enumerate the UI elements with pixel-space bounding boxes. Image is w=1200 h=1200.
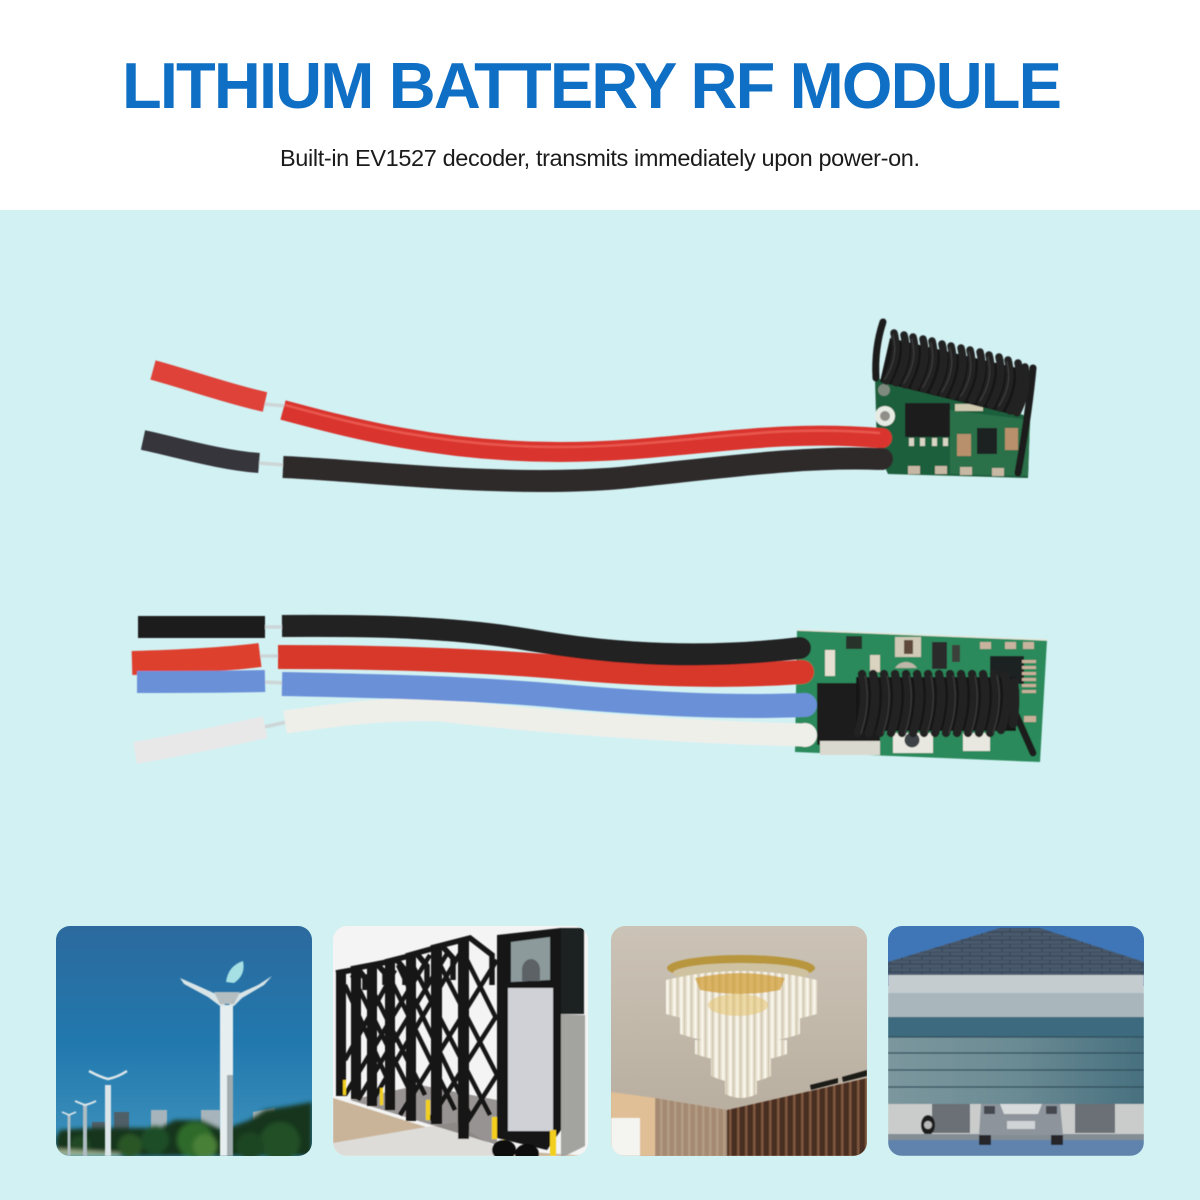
header background bbox=[0, 0, 1200, 210]
photo: retractable gate bbox=[333, 926, 588, 1164]
wires: black, red, blue, white bbox=[132, 626, 817, 753]
car bbox=[979, 1104, 1063, 1135]
large lamp bbox=[180, 961, 272, 1156]
circuit board bbox=[795, 630, 1047, 762]
lattice bbox=[345, 945, 497, 1130]
trees bbox=[56, 1102, 312, 1162]
coil antenna bbox=[876, 322, 1033, 473]
photo: garage door bbox=[888, 926, 1144, 1156]
photo: crystal chandelier bbox=[611, 926, 867, 1156]
wires: red and black bbox=[143, 370, 893, 481]
walls bbox=[611, 1070, 867, 1156]
garage interior bbox=[888, 1104, 1144, 1136]
distant buildings bbox=[150, 1109, 220, 1130]
title: LITHIUM BATTERY RF MODULE bbox=[122, 49, 1062, 122]
photo: street lamps bbox=[56, 926, 312, 1162]
driveway bbox=[888, 1134, 1144, 1140]
product: two-wire RF module bbox=[143, 322, 1033, 481]
subtitle: Built-in EV1527 decoder, transmits immediately upon power-on. bbox=[280, 145, 920, 171]
product: four-wire RF module bbox=[132, 626, 1047, 762]
ground bbox=[333, 1098, 588, 1156]
roof bbox=[888, 928, 1144, 975]
door panel bbox=[497, 928, 561, 1150]
chandelier bbox=[666, 955, 817, 1098]
coil antenna and crystal block bbox=[817, 674, 1033, 755]
circuit board bbox=[875, 378, 1030, 478]
small lamps bbox=[62, 1071, 127, 1156]
gate posts bbox=[336, 940, 469, 1139]
fascia bbox=[888, 975, 1144, 993]
garage door slats bbox=[888, 1037, 1144, 1105]
